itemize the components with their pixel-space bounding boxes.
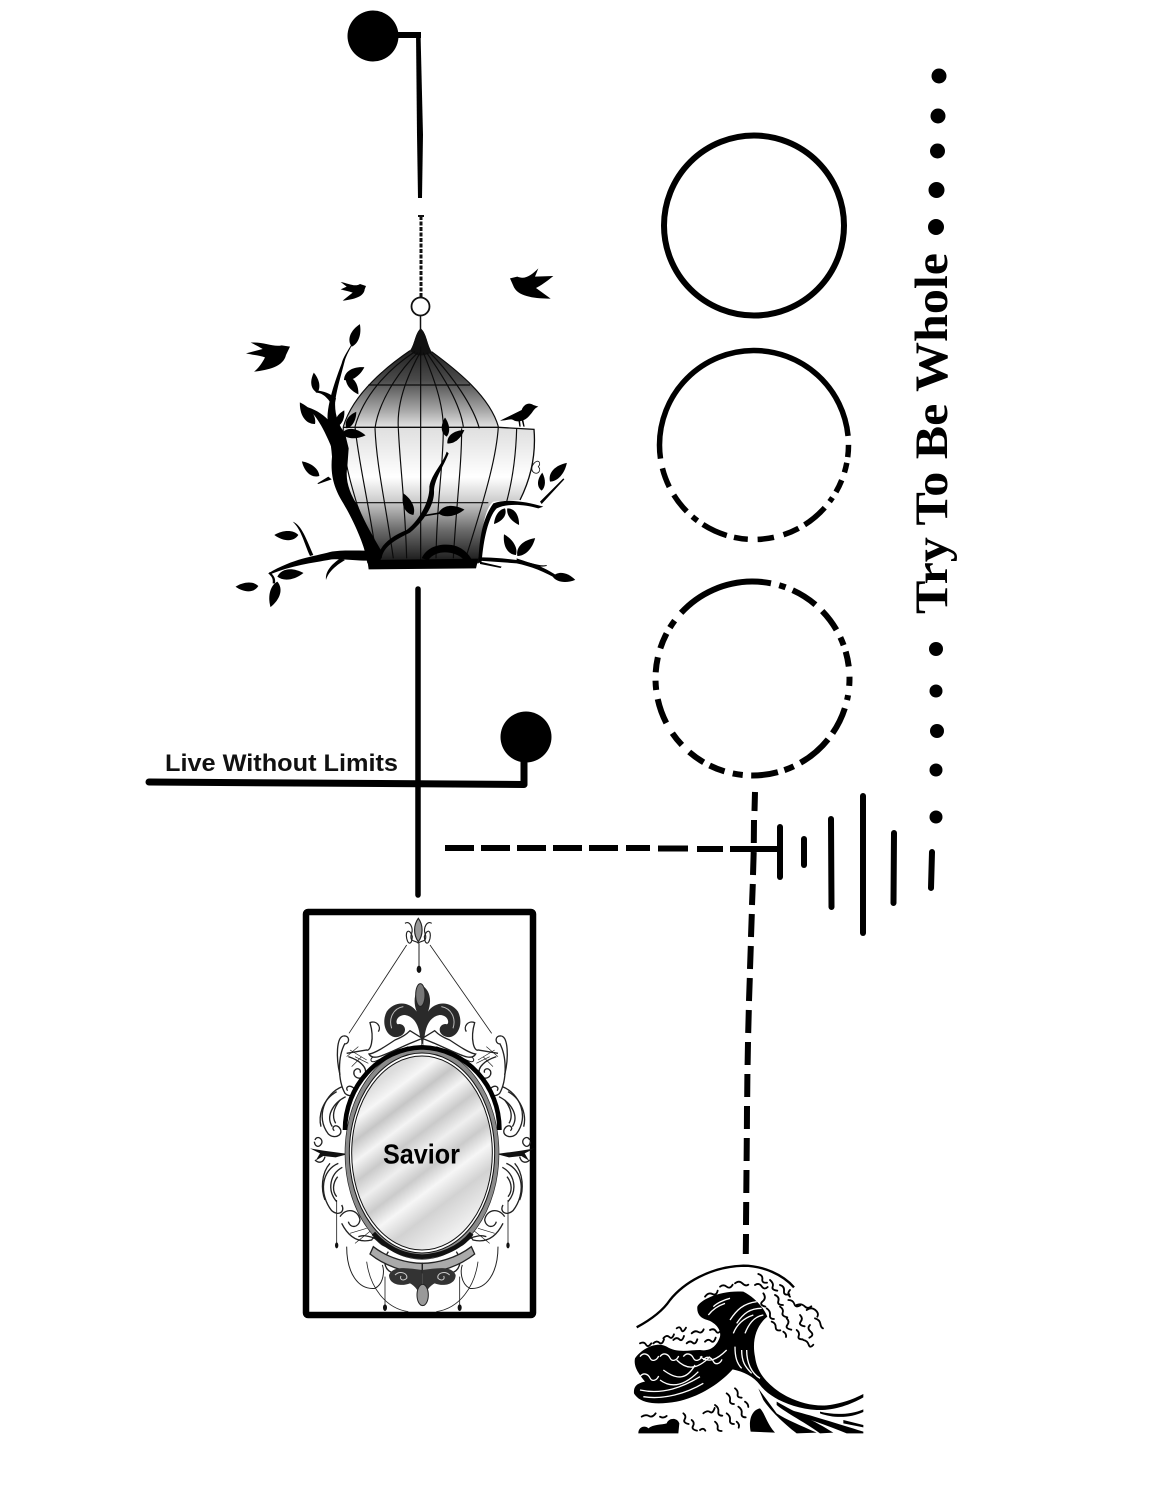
tree branches — [268, 327, 564, 583]
label: Live Without Limits: Live Without Limits — [165, 750, 398, 777]
framed mirror panel — [306, 912, 535, 1315]
cage body — [342, 328, 540, 563]
vertical title: Try To Be Whole: Try To Be Whole — [906, 253, 958, 614]
mostly dashed circle — [656, 582, 850, 776]
mirror label: Savior — [383, 1138, 460, 1169]
top pendant: ball and line — [348, 10, 423, 198]
foam squiggles — [640, 1274, 823, 1431]
partly dashed circle — [660, 350, 848, 540]
wave dark mass — [634, 1291, 863, 1410]
wave white streaks — [640, 1298, 763, 1398]
lower water shapes — [638, 1388, 863, 1433]
line below cage and cross line — [149, 589, 524, 895]
dashed vertical connector to wave — [746, 792, 755, 1254]
flying and perched birds — [246, 268, 553, 427]
panel frame — [306, 912, 533, 1315]
hanging chain and ring — [412, 216, 430, 330]
sound-wave bars — [780, 796, 932, 933]
wave outline — [637, 1266, 794, 1327]
lower ball — [500, 712, 552, 762]
ornate mirror — [310, 918, 535, 1312]
great wave illustration — [634, 1266, 863, 1433]
dashed horizontal connector — [445, 848, 778, 849]
solid circle — [664, 136, 844, 316]
birdcage illustration with tree and birds — [235, 268, 576, 609]
leaves — [235, 322, 576, 609]
lower dot column — [929, 642, 944, 824]
upper dot column — [928, 68, 946, 235]
